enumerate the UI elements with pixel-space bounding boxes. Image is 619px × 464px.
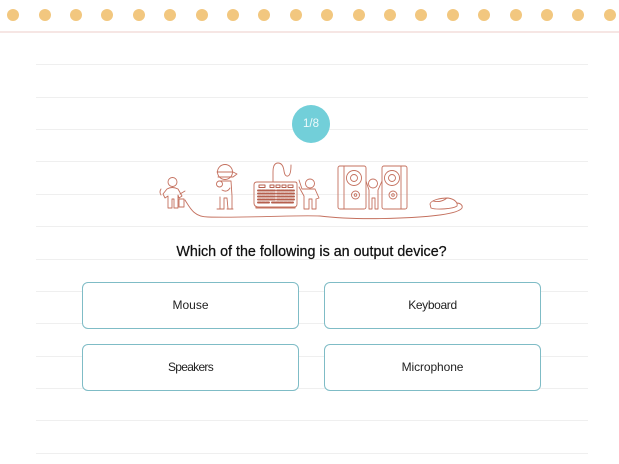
icon: keyboard with cable xyxy=(254,163,297,208)
progress badge xyxy=(292,105,330,143)
figure: person wearing headset xyxy=(216,164,237,209)
answer option: Mouse: Mouse xyxy=(172,298,209,312)
figure: child with mouse xyxy=(160,178,185,208)
icon: speakers with person xyxy=(338,166,407,209)
answer option: Microphone: Microphone xyxy=(402,360,463,374)
progress badge: 1/8 xyxy=(303,118,319,130)
answer option: Microphone xyxy=(324,344,541,391)
figure: person beside keyboard xyxy=(299,179,319,209)
answer option: Mouse xyxy=(82,282,299,329)
answer option: Keyboard: Keyboard xyxy=(408,298,457,312)
top binder strip with dots xyxy=(0,0,619,33)
question heading: Which of the following is an output device? xyxy=(176,244,447,260)
cable linking the devices xyxy=(185,200,462,219)
icon: computer mouse xyxy=(430,198,457,209)
illustration: people with computer devices xyxy=(160,162,463,220)
answer option: Keyboard xyxy=(324,282,541,329)
answer option: Speakers xyxy=(82,344,299,391)
answer option: Speakers: Speakers xyxy=(168,360,213,374)
